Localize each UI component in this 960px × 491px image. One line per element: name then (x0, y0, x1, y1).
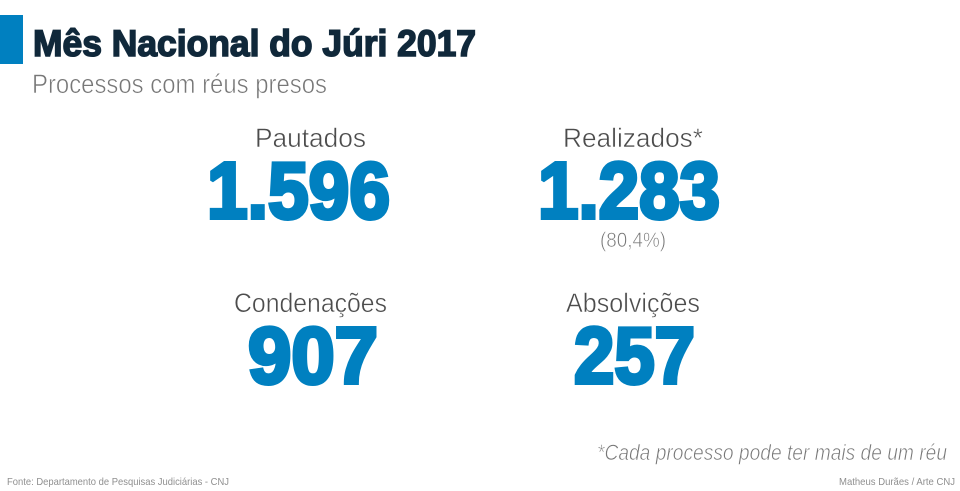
value: 257: 257 (574, 311, 695, 400)
percentage: 80,4%: (80,4%) (600, 229, 666, 252)
stat: Absolvições (566, 288, 700, 400)
label: Absolvições: Absolvições (566, 288, 700, 318)
value: 1.283: 1.283 (538, 146, 720, 235)
source credit: Fonte: Departamento de Pesquisas Judiciárias - CNJ (7, 476, 229, 488)
label: Pautados: Pautados (255, 123, 366, 153)
stat: Condenações (234, 288, 387, 400)
label: Condenações: Condenações (234, 288, 387, 318)
label: Realizados: Realizados* (563, 123, 703, 153)
value: 1.596: 1.596 (207, 146, 390, 235)
value: 907: 907 (248, 311, 378, 400)
stat: Pautados (207, 123, 390, 235)
subtitle: Processos com réus presos (32, 69, 327, 99)
title: Mês Nacional do Júri 2017 (33, 23, 476, 64)
header accent bar (0, 15, 23, 64)
stat: Realizados (538, 123, 720, 252)
